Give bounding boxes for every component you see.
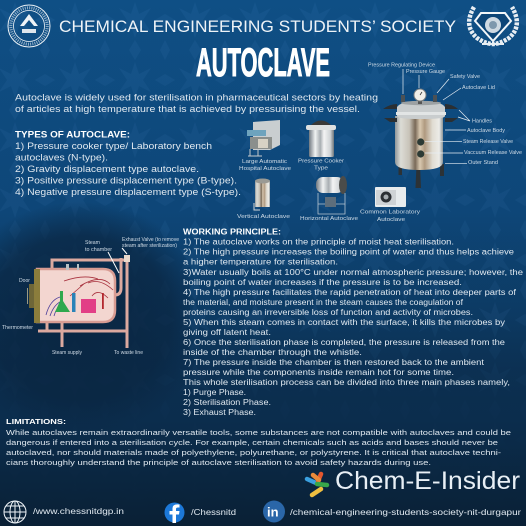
- handles: [383, 104, 458, 122]
- autoclave lid: [397, 101, 445, 119]
- diagram labels: Steam supply: [52, 350, 82, 356]
- working principle: 3) Exhaust Phase.: [183, 408, 256, 417]
- main autoclave part labels: Outer Stand: [468, 160, 498, 166]
- facebook link: /Chessnitd: [191, 507, 236, 517]
- main autoclave part labels: Autoclave Body: [467, 128, 506, 134]
- limitations: LIMITATIONS:: [6, 417, 66, 426]
- diagram labels: Steam: [85, 240, 100, 246]
- chem-e-insider brand: Chem-E-Insider: [335, 467, 520, 495]
- top fittings: [66, 264, 79, 270]
- autoclave: large automatic hospital: [239, 120, 291, 172]
- autoclave: vertical: Vertical Autoclave: [237, 214, 290, 220]
- limitations: dangerous if entered into a sterilisation cycle. For example, certain chemicals such as acids and bases should never be: [6, 438, 498, 447]
- autoclave: horizontal: Horizontal Autoclave: [300, 216, 358, 222]
- main autoclave leader lines: [403, 69, 470, 163]
- main autoclave part labels: Steam Release Valve: [463, 139, 513, 145]
- autoclave: pressure cooker type: Pressure Cooker: [298, 158, 344, 164]
- autoclave: pressure cooker type: [298, 120, 344, 172]
- icon: chem-e-insider molecule: [307, 474, 327, 495]
- linkedin link: /chemical-engineering-students-society-nit-durgapur: [290, 507, 521, 517]
- types of autoclave: 1) Pressure cooker type/ Laboratory bench: [15, 141, 212, 151]
- main autoclave illustration: [383, 89, 458, 188]
- diagram labels: [2, 237, 179, 356]
- limitations: While autoclaves remain extraordinarily versatile tools, some substances are not compatible with autoclaves and could be: [6, 428, 511, 437]
- types of autoclave: 3) Positive pressure displacement type (B-type).: [15, 175, 237, 185]
- icon: society emblem right: [469, 7, 517, 45]
- diagram labels: to chamber: [85, 247, 112, 253]
- types of autoclave: TYPES OF AUTOCLAVE:: [15, 130, 130, 140]
- intro text: [15, 92, 378, 114]
- exhaust valve: [124, 255, 130, 262]
- main title: AUTOCLAVE: [196, 41, 330, 85]
- types of autoclave: autoclaves (N-type).: [15, 152, 108, 162]
- stand legs: [398, 164, 444, 188]
- main autoclave part labels: Handles: [472, 119, 493, 125]
- limitations: autoclaved, nor should materials made of polyethylene, polyurethane, or polystyrene. It is critical that autoclave techni-: [6, 448, 502, 457]
- facebook link: [164, 502, 236, 523]
- valves: [401, 95, 437, 102]
- process diagram: [2, 237, 179, 356]
- working principle: proteins causing an irreversible loss of function and activity of microbes.: [183, 308, 473, 317]
- main autoclave part labels: Pressure Regulating Device: [368, 63, 435, 69]
- autoclave: large automatic hospital: Large Automatic: [242, 159, 288, 165]
- rod: [102, 293, 104, 309]
- working principle: 1) Purge Phase.: [183, 388, 246, 397]
- working principle: 5) When this steam comes in contact with the surface, it kills the microbes by: [183, 318, 505, 327]
- icon: globe: [4, 501, 26, 523]
- autoclave body: [395, 116, 443, 170]
- main autoclave part labels: Autoclave Lid: [462, 85, 495, 91]
- autoclave: horizontal: [300, 176, 358, 222]
- autoclave: vertical: [237, 178, 290, 220]
- autoclave: common laboratory: Common Laboratory: [360, 210, 421, 216]
- diagram labels: To waste line: [114, 350, 143, 356]
- beaker: [81, 299, 96, 313]
- pipework: [38, 258, 128, 348]
- types of autoclave: [15, 130, 241, 197]
- types of autoclave: 2) Gravity displacement type autoclave.: [15, 164, 199, 174]
- release valve knobs: [417, 138, 424, 158]
- website link: [4, 501, 124, 523]
- intro text: of articles at high temperature that is achieved by pressurising the vessel.: [15, 104, 360, 114]
- air displaced: [46, 297, 62, 316]
- chamber: [37, 269, 115, 322]
- diagram labels: steam after sterilization): [122, 243, 177, 249]
- linkedin link: [263, 500, 521, 522]
- diagram labels: Exhaust Valve (to remove: [122, 237, 179, 243]
- door: [27, 269, 40, 323]
- autoclave: large automatic hospital: Hospital Autoclave: [239, 166, 291, 172]
- main autoclave part labels: Pressure Gauge: [406, 69, 445, 75]
- icon: linkedin: [263, 500, 285, 522]
- pressure gauge: [414, 89, 426, 104]
- steam arrow: [108, 248, 127, 273]
- working principle: 6) Once the sterilisation phase is completed, the pressure is released from the: [183, 338, 506, 347]
- working principle: 2) Sterilisation Phase.: [183, 398, 271, 407]
- working principle: 1) The autoclave works on the principle of moist heat sterilisation.: [183, 238, 454, 246]
- working principle: This whole sterilisation process can be divided into three main phases namely,: [183, 378, 510, 387]
- working principle: 2) The high pressure increases the boiling point of water and thus helps achieve: [183, 248, 515, 256]
- main autoclave part labels: [368, 63, 522, 166]
- types of autoclave: 4) Negative pressure displacement type (S-type).: [15, 187, 241, 197]
- test tube: [72, 293, 76, 312]
- autoclave: pressure cooker type: Type: [314, 166, 328, 172]
- working principle: 3)Water usually boils at 100°C under normal atmospheric pressure; however, the: [183, 268, 524, 277]
- autoclave: common laboratory: [360, 187, 421, 223]
- main autoclave part labels: Safety Valve: [450, 74, 480, 80]
- steam flow arrows: [64, 277, 113, 298]
- flask: [55, 291, 70, 312]
- icon: linkedin: in: [267, 504, 279, 520]
- working principle: a higher temperature for sterilisation.: [183, 258, 338, 267]
- working principle: [183, 227, 524, 417]
- working principle: pressure while the components inside remain hot for some time.: [183, 368, 454, 377]
- limitations: cians thoroughly understand the principle of autoclave sterilisation to avoid safety hazards during use.: [6, 458, 431, 467]
- main autoclave part labels: Vaccuum Release Valve: [464, 150, 522, 156]
- working principle: boiling point of water increases if the pressure is to be increased.: [183, 278, 462, 287]
- diagram labels: Thermometer: [2, 325, 33, 331]
- icon: facebook: [164, 502, 184, 523]
- icon: society logo left: [8, 5, 50, 47]
- society title: CHEMICAL ENGINEERING STUDENTS’ SOCIETY: [59, 17, 456, 36]
- working principle: the material, and moisture present in the steam causes the coagulation of: [183, 298, 464, 307]
- working principle: 4) The high pressure facilitates the rapid penetration of heat into deeper parts of: [183, 288, 517, 297]
- limitations: [6, 417, 511, 467]
- working principle: inside of the chamber through the whistle.: [183, 348, 362, 357]
- diagram labels: Door: [19, 278, 30, 284]
- website link: /www.chessnitdgp.in: [33, 506, 124, 516]
- working principle: WORKING PRINCIPLE:: [183, 227, 281, 236]
- intro text: Autoclave is widely used for sterilisation in pharmaceutical sectors by heating: [15, 92, 378, 102]
- working principle: giving off latent heat.: [183, 328, 271, 337]
- autoclave: common laboratory: Autoclave: [377, 217, 405, 223]
- working principle: 7) The pressure inside the chamber is then restored back to the ambient: [183, 358, 485, 367]
